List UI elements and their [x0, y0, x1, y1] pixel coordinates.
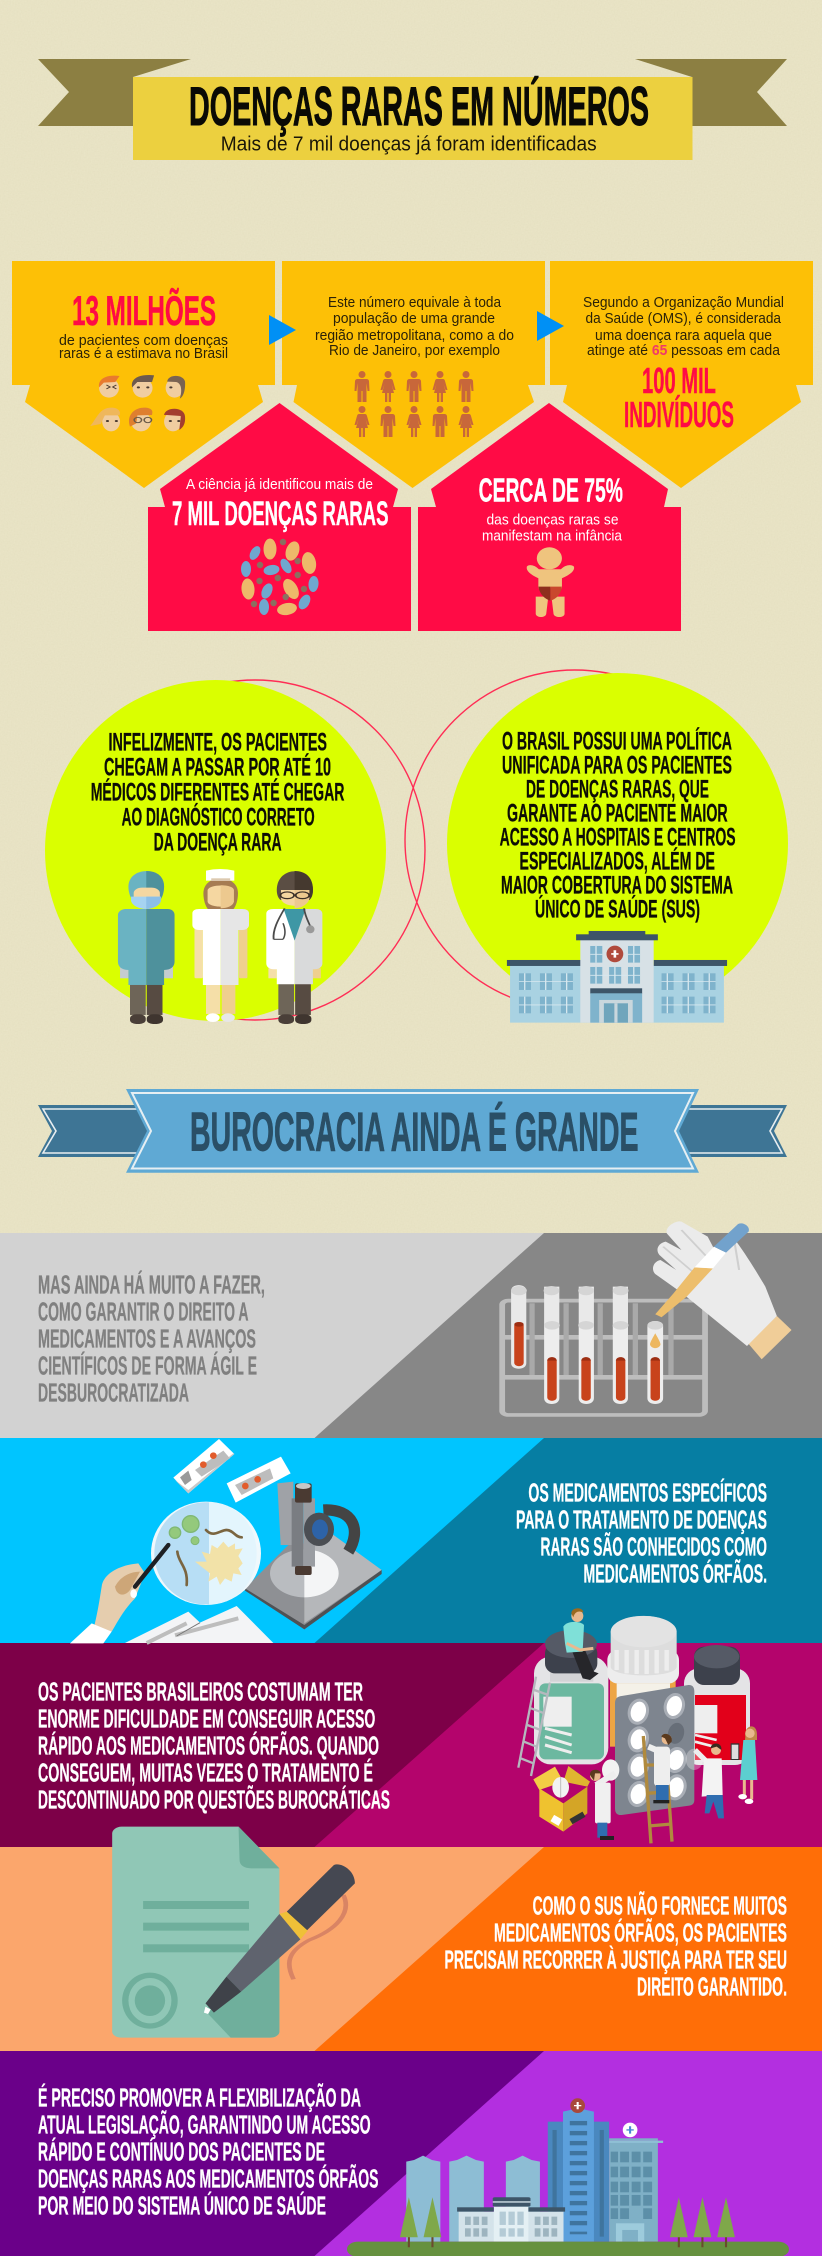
icon: green bottle [534, 1630, 608, 1764]
header ribbon [38, 59, 787, 160]
panel: 13 milhoes [12, 261, 275, 488]
panel: circle medicos: MÉDICOS DIFERENTES ATÉ CHEGAR [91, 777, 344, 806]
panel: OMS [550, 261, 813, 488]
panel: OMS: Segundo a Organização Mundial [583, 295, 784, 311]
text: pacientes brasileiros [38, 1678, 390, 1815]
panel: strip orange [0, 1847, 822, 2051]
icon: trees [400, 2197, 735, 2247]
icon: faces [90, 375, 185, 431]
panel: 7 mil doencas [148, 403, 411, 631]
text: flexibilizacao: É PRECISO PROMOVER A FLEXIBILIZAÇÃO DA [38, 2083, 361, 2113]
icon: ground [347, 2242, 789, 2256]
panel: OMS: da Saúde (OMS), é considerada [586, 311, 782, 327]
panel: 13 milhoes: raras é a estimava no Brasil [59, 346, 228, 362]
panel: populacao [282, 261, 545, 488]
banner: burocracia [38, 1089, 787, 1173]
panel: circle medicos: INFELIZMENTE, OS PACIENTES [108, 729, 327, 757]
panel: cerca de 75%: das doenças raras se [486, 513, 618, 529]
icon: red bottle [684, 1645, 750, 1765]
panel: circle medicos: DA DOENÇA RARA [154, 828, 282, 856]
icon: box [533, 1766, 590, 1832]
panel: 13 milhoes: de pacientes com doenças [59, 333, 228, 349]
text: pacientes brasileiros: CONSEGUEM, MUITAS VEZES O TRATAMENTO É [38, 1759, 373, 1788]
text: pacientes brasileiros: RÁPIDO AOS MEDICAMENTOS ÓRFÃOS. QUANDO [38, 1731, 379, 1761]
panel: populacao: Rio de Janeiro, por exemplo [329, 343, 500, 359]
text: mas ainda: MEDICAMENTOS E A AVANÇOS [38, 1326, 256, 1354]
icon: test tubes and gloved hand [502, 1221, 792, 1415]
icon: people [354, 371, 474, 437]
icon: hospital [507, 931, 727, 1023]
icon: slides [173, 1439, 291, 1503]
panel: strip purple [0, 2051, 822, 2256]
text: medicamentos especificos [516, 1479, 767, 1589]
icon: document with pen [112, 1827, 355, 2038]
icon: scientist with pill [590, 1759, 619, 1840]
icon: nurse [731, 1726, 757, 1804]
panel: 7 mil doencas: 7 MIL DOENÇAS RARAS [172, 495, 388, 533]
icon: scientist on ladder [648, 1734, 672, 1803]
panel: strip blue [0, 1438, 822, 1643]
icon: papers [125, 1606, 273, 1643]
text: mas ainda: CIENTÍFICOS DE FORMA ÁGIL E [38, 1352, 257, 1381]
panel: 13 milhoes: 13 MILHÕES [72, 286, 216, 334]
text: pacientes brasileiros: ENORME DIFICULDADE EM CONSEGUIR ACESSO [38, 1705, 375, 1733]
panel: OMS: atinge até 65 pessoas em cada [587, 343, 781, 359]
text: flexibilizacao: RÁPIDO E CONTÍNUO DOS PACIENTES DE [38, 2138, 325, 2167]
text: flexibilizacao: POR MEIO DO SISTEMA ÚNICO DE SAÚDE [38, 2191, 326, 2221]
text: flexibilizacao [38, 2083, 378, 2221]
panel: 7 mil doencas: A ciência já identificou mais de [186, 477, 373, 493]
icon: bacteria [241, 538, 319, 617]
text: mas ainda: MAS AINDA HÁ MUITO A FAZER, [38, 1270, 265, 1299]
panel: cerca de 75%: manifestam na infância [482, 529, 623, 545]
icon: blister pack [615, 1685, 694, 1815]
icon: scientist with glasses [686, 1744, 724, 1818]
arrow 2 [537, 311, 564, 341]
panel: circle politica [405, 670, 788, 1014]
panel: strip magenta [0, 1643, 822, 1847]
panel: strip gray [0, 1233, 822, 1438]
text: flexibilizacao: ATUAL LEGISLAÇÃO, GARANTINDO UM ACESSO [38, 2110, 371, 2140]
panel: circle medicos: CHEGAM A PASSAR POR ATÉ 10 [104, 752, 331, 781]
icon: ladder right [643, 1736, 672, 1843]
icon: orange bottle [607, 1616, 679, 1747]
subtitle: Mais de 7 mil doenças já foram identificadas [221, 133, 597, 156]
icon: microscope and petri dish [70, 1439, 382, 1643]
icon: city with hospitals [347, 2098, 789, 2256]
icon: hand with pen [70, 1545, 168, 1643]
arrow 1 [269, 315, 296, 345]
text: mas ainda [38, 1270, 265, 1408]
panel: circle medicos [45, 680, 425, 1021]
panel: circle politica: ÚNICO DE SAÚDE (SUS) [535, 893, 700, 923]
panel: populacao: população de uma grande [333, 311, 495, 327]
icon: medical staff [118, 869, 322, 1024]
panel: OMS: uma doença rara aquela que [595, 328, 772, 344]
panel: populacao: Este número equivale à toda [328, 295, 502, 311]
icon: baby [527, 547, 574, 617]
text: pacientes brasileiros: DESCONTINUADO POR QUESTÕES BUROCRÁTICAS [38, 1785, 390, 1815]
icon: medicine bottles and tiny people [518, 1608, 757, 1843]
text: pacientes brasileiros: OS PACIENTES BRASILEIROS COSTUMAM TER [38, 1678, 363, 1706]
icon: man sitting [563, 1608, 599, 1680]
text: mas ainda: COMO GARANTIR O DIREITO A [38, 1299, 249, 1327]
panel: OMS: 100 MIL [642, 360, 716, 401]
text: flexibilizacao: DOENÇAS RARAS AOS MEDICAMENTOS ÓRFÃOS [38, 2164, 378, 2194]
panel: cerca de 75%: CERCA DE 75% [479, 472, 623, 509]
panel: cerca de 75% [418, 403, 681, 631]
icon: ladder left [518, 1677, 550, 1776]
text: mas ainda: DESBUROCRATIZADA [38, 1380, 189, 1408]
panel: populacao: região metropolitana, como a do [315, 328, 514, 344]
text: sus [444, 1891, 787, 2002]
panel: circle medicos: AO DIAGNÓSTICO CORRETO [122, 801, 315, 831]
